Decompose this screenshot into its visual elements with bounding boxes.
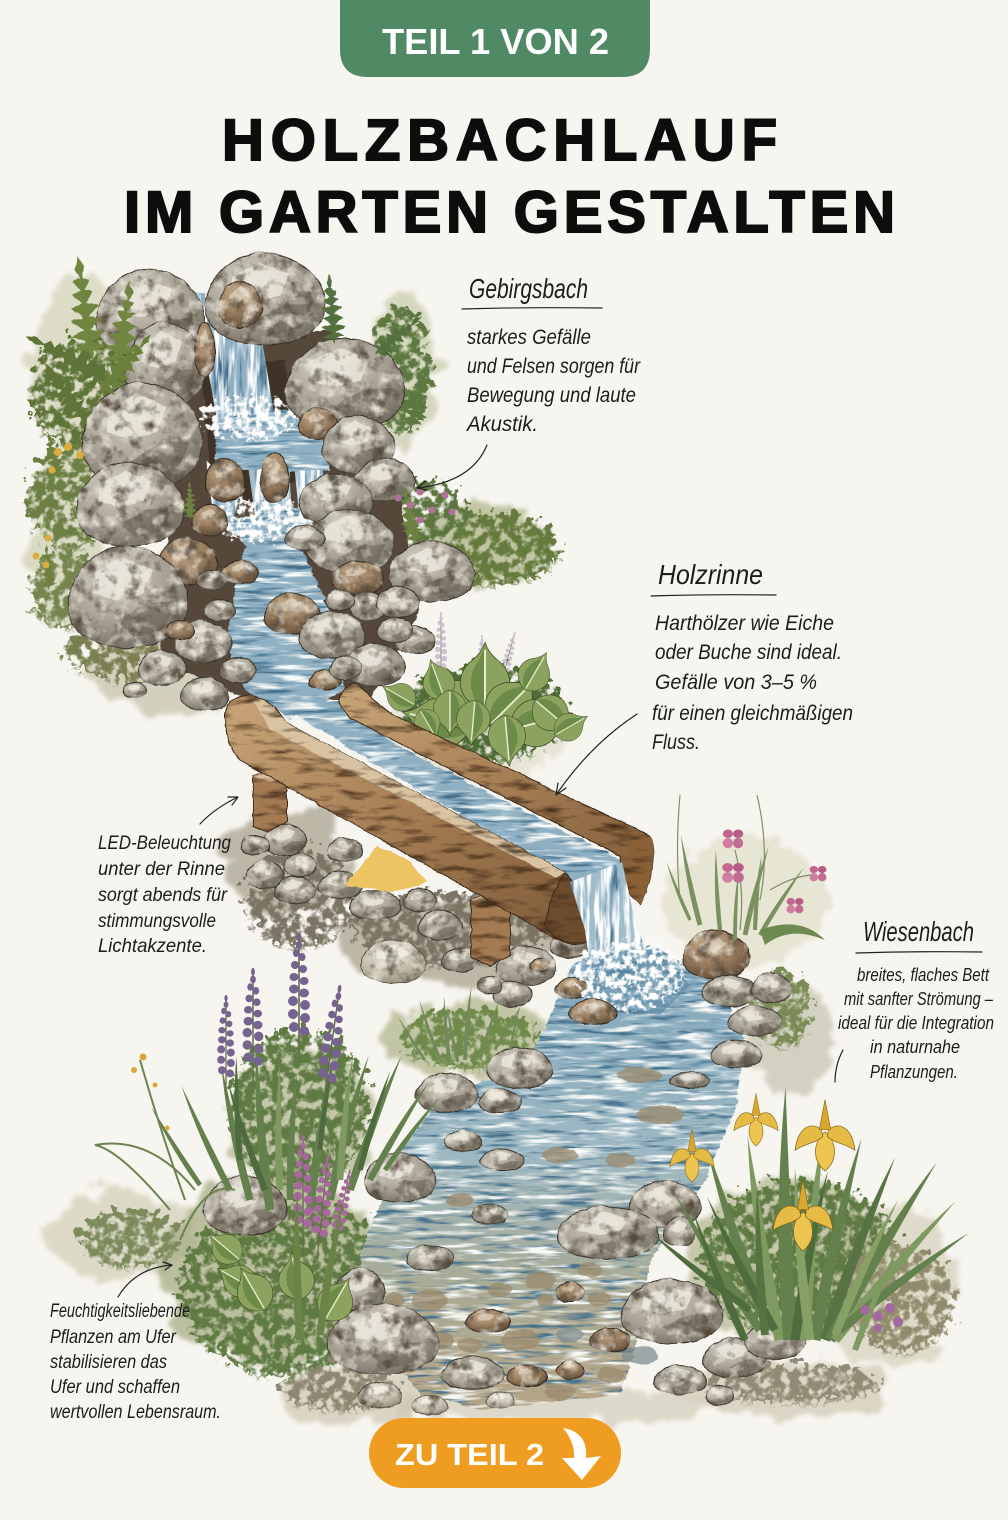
title: [124, 108, 895, 245]
annotation: LED lighting: LED-Beleuchtung: [98, 833, 231, 854]
annotation: moisture-loving plants: stabilisieren das: [50, 1352, 167, 1373]
annotation: moisture-loving plants: Pflanzen am Ufer: [50, 1327, 177, 1348]
water: foam below trough fall: [575, 939, 690, 1015]
annotation: LED lighting: [98, 797, 238, 957]
annotation: Gebirgsbach: starkes Gefälle: [467, 326, 591, 349]
annotation: LED lighting: stimmungsvolle: [98, 911, 216, 932]
annotation: Holzrinne: [556, 559, 853, 795]
plant: lupins and reeds, lower left: [95, 933, 440, 1340]
annotation: Wiesenbach: Pflanzungen.: [870, 1062, 958, 1082]
annotation: LED lighting: unter der Rinne: [98, 859, 225, 880]
annotation: Holzrinne: oder Buche sind ideal.: [655, 641, 842, 664]
annotation: Gebirgsbach: Bewegung und laute: [467, 384, 636, 407]
rocks: mountain section: [68, 253, 475, 710]
tab: part indicator: TEIL 1 VON 2: [382, 21, 609, 62]
icon: curved arrow: [562, 1428, 601, 1480]
posts under the trough: [253, 770, 510, 966]
watercolor washes behind the scene: [30, 275, 955, 1424]
annotation: Holzrinne: Fluss.: [652, 731, 700, 754]
annotation: Gebirgsbach: Gebirgsbach: [469, 273, 588, 304]
waterfall from trough: [570, 862, 650, 965]
annotation: moisture-loving plants: wertvollen Lebensraum.: [50, 1402, 221, 1423]
annotation: Holzrinne: für einen gleichmäßigen: [652, 702, 853, 725]
tab: part indicator: [340, 0, 650, 77]
rocks: meadow section: [203, 930, 805, 1415]
annotation: moisture-loving plants: Feuchtigkeitsliebende: [50, 1301, 190, 1322]
water: meadow stream: [360, 945, 745, 1410]
water: mountain stream: [200, 360, 300, 520]
annotation: Holzrinne: Harthölzer wie Eiche: [655, 612, 834, 635]
button: continue to part 2: ZU TEIL 2: [395, 1437, 544, 1472]
button: continue to part 2: [369, 1418, 621, 1488]
annotation: Holzrinne: Holzrinne: [658, 559, 763, 590]
plant: reeds and grass at stream bank: [394, 985, 522, 1065]
water: stream pools: [215, 410, 345, 720]
annotation: LED lighting: sorgt abends für: [98, 885, 228, 906]
glow: LED light: [345, 845, 428, 892]
plant: grasses and wildflower, right of trough: [662, 795, 826, 945]
gravel bed under trough: [241, 824, 590, 1006]
title: HOLZBACHLAUF: [222, 108, 777, 173]
title: IM GARTEN GESTALTEN: [124, 180, 895, 245]
annotation: Gebirgsbach: [417, 273, 641, 490]
water inside trough: [280, 700, 630, 900]
annotation: moisture-loving plants: Ufer und schaffen: [50, 1377, 180, 1398]
annotation: Gebirgsbach: Akustik.: [465, 413, 538, 436]
right log: [338, 684, 653, 905]
plant: ferns and wild herbs, upper area: [19, 254, 440, 591]
foliage: speckled shrub masses: [25, 305, 955, 1412]
plant: hosta leaves: [375, 642, 595, 768]
wooden trough: [225, 684, 653, 945]
plant: yellow irises, lower right: [644, 1087, 969, 1352]
annotation: Wiesenbach: in naturnahe: [870, 1037, 960, 1057]
annotation: LED lighting: Lichtakzente.: [98, 936, 207, 957]
water: upper falls: [190, 292, 324, 525]
left log: [225, 695, 588, 945]
ground: dark earth behind mountain rocks: [160, 330, 420, 700]
annotation: moisture-loving plants: [50, 1262, 221, 1423]
flowers: yellow and pink accents, upper area: [32, 443, 520, 694]
annotation: Holzrinne: Gefälle von 3–5 %: [655, 671, 817, 694]
annotation: Gebirgsbach: und Felsen sorgen für: [467, 355, 641, 378]
pebbles under the water: [385, 1067, 684, 1400]
water: foam at fall bases: [200, 396, 314, 542]
annotation: Wiesenbach: [835, 916, 994, 1082]
